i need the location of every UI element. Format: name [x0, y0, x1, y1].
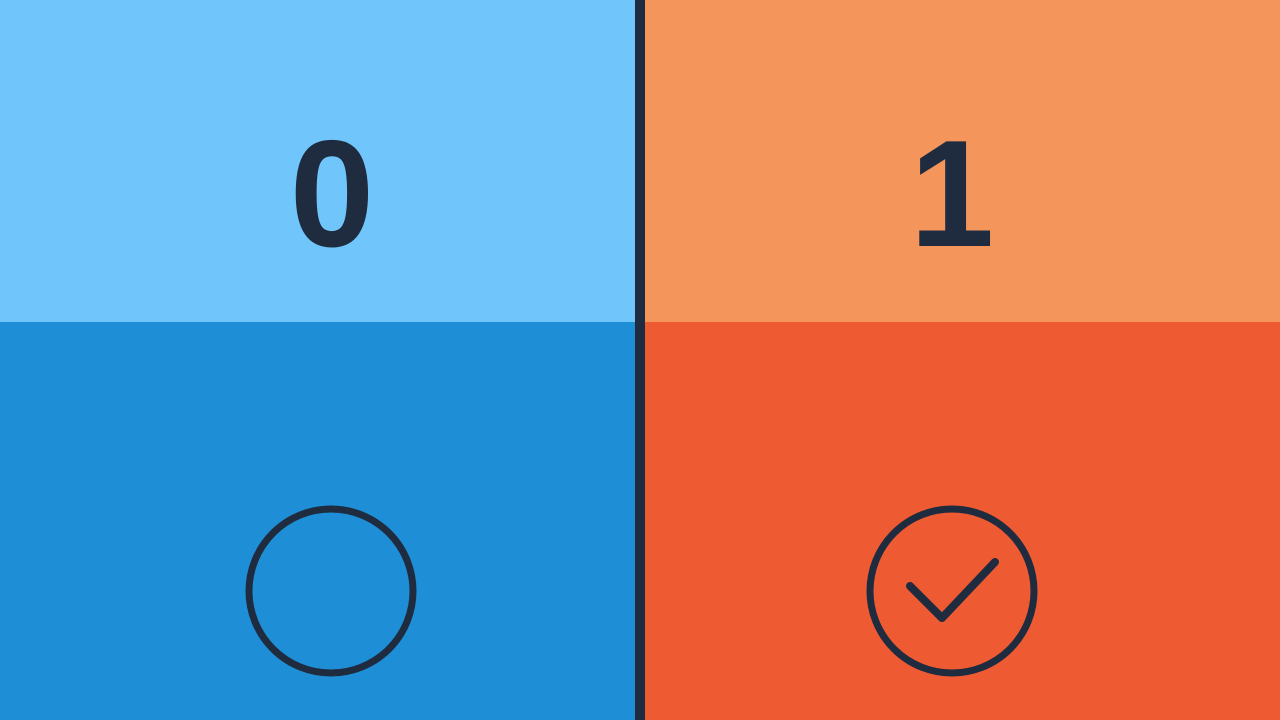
panel: bottom-left blue: [0, 322, 635, 720]
divider: [635, 0, 645, 720]
icon: check circle: [866, 506, 1038, 676]
number 1: 1: [910, 109, 994, 279]
icon: empty circle: [246, 506, 416, 676]
panel: top-left light blue: [0, 0, 635, 322]
panel: top-right orange: [645, 0, 1280, 322]
panel: bottom-right red-orange: [645, 322, 1280, 720]
number 0: 0: [290, 109, 374, 279]
